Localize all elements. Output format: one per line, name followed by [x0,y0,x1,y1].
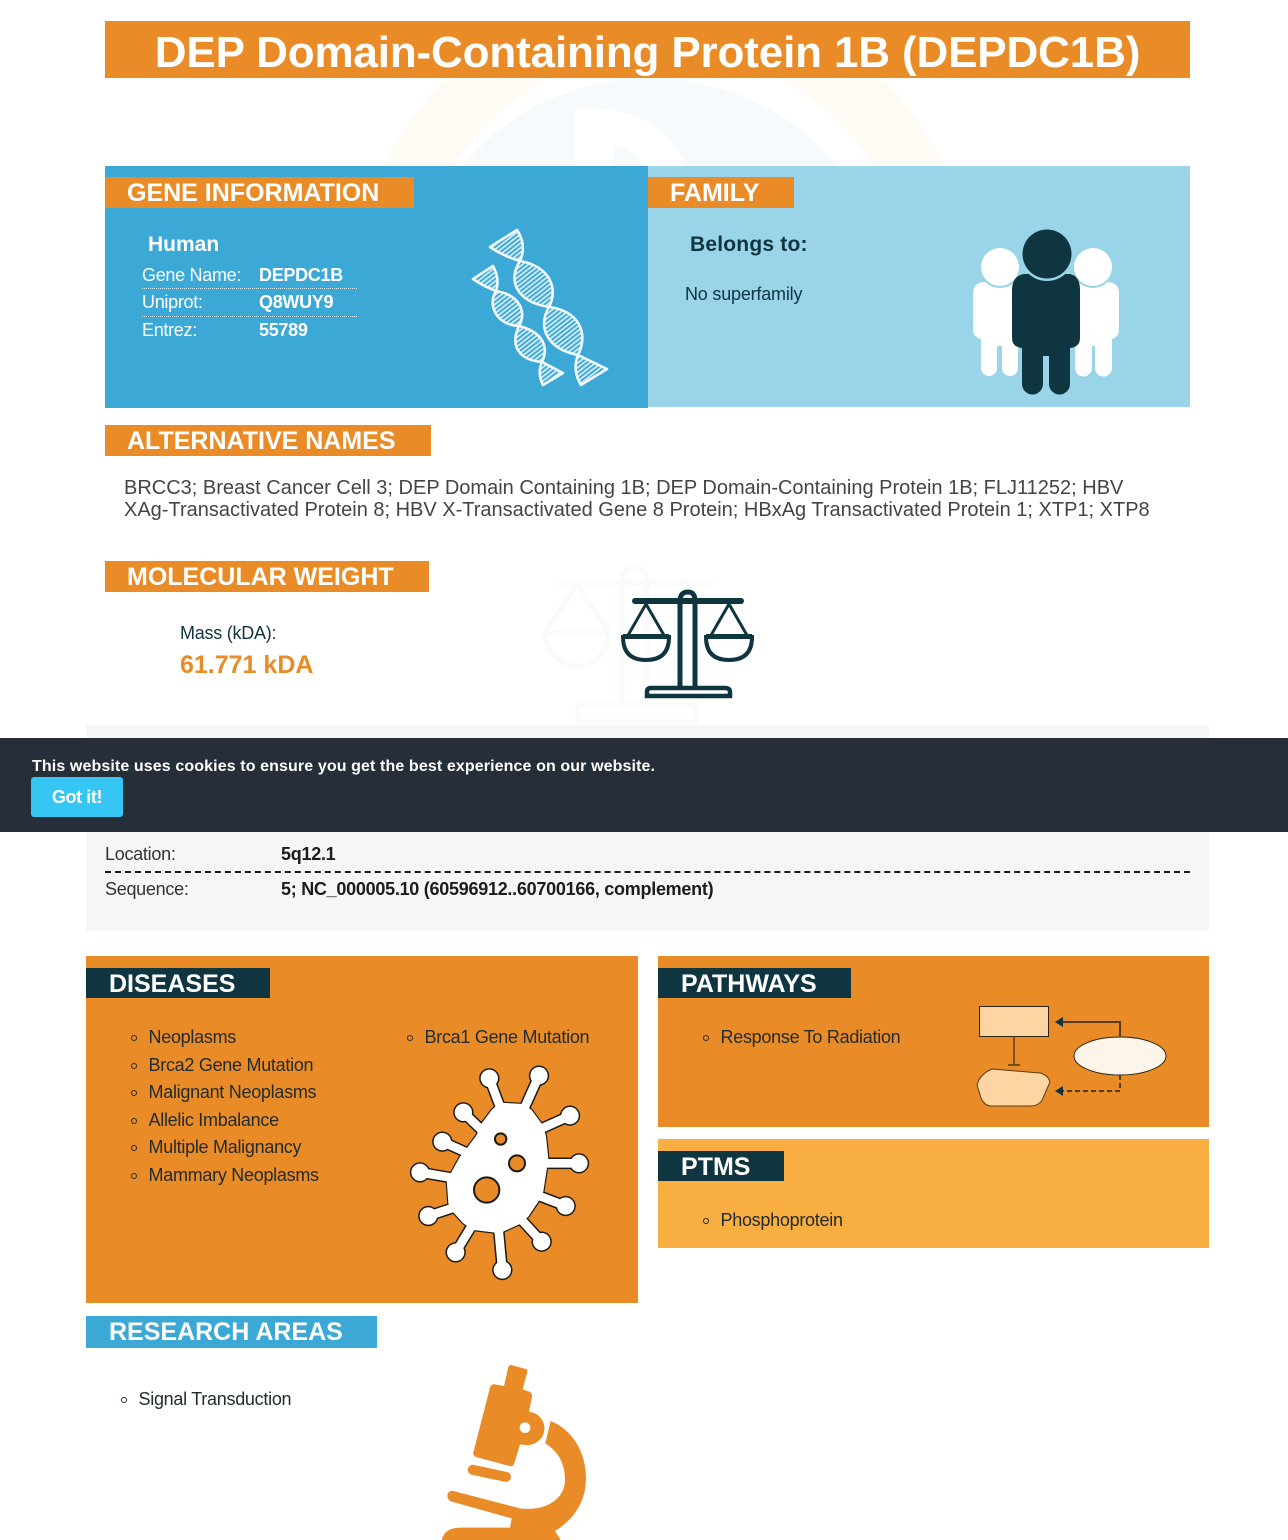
heading: research areas: RESEARCH AREAS [109,1318,343,1346]
disease list: Brca2 Gene Mutation [148,1055,313,1075]
icon: pathway diagram [976,1006,1166,1106]
gene name row: Gene Name: [142,265,241,285]
panel: genomic location: 5; NC_000005.10 (60596912..60700166, complement) [281,879,713,899]
superfamily text: No superfamily [685,284,802,304]
gene name row [142,264,357,289]
cookie message: This website uses cookies to ensure you get the best experience on our website. [32,758,655,774]
entrez row [142,320,308,340]
sequence row [105,879,713,899]
icon: balance scale [621,590,754,698]
uniprot row: Uniprot: [142,292,203,312]
icon: DNA helices [472,228,608,386]
icon: people [973,230,1119,394]
uniprot row [142,291,357,317]
heading: gene information: GENE INFORMATION [127,179,379,207]
location row [105,843,1190,873]
disease list: Neoplasms [148,1027,236,1047]
heading: ptms [658,1151,784,1181]
heading: pathways: PATHWAYS [681,970,817,998]
heading: diseases [86,968,270,998]
background watermark [384,78,944,166]
icon: virus [410,1065,590,1280]
mass value: 61.771 kDA [180,651,313,679]
heading: family: FAMILY [670,179,759,207]
icon: microscope [442,1365,586,1540]
cookie banner [0,738,1288,832]
uniprot row: Q8WUY9 [259,292,333,312]
heading: alternative names: ALTERNATIVE NAMES [127,427,396,455]
panel: diseases [86,956,638,1303]
alternative names text: BRCC3; Breast Cancer Cell 3; DEP Domain Containing 1B; DEP Domain-Containing Protein 1B; FLJ11252; HBV [124,477,1123,499]
disease list: Mammary Neoplasms [148,1165,319,1185]
mass label: Mass (kDA): [180,623,276,643]
heading: family [648,177,794,208]
title: DEP Domain-Containing Protein 1B (DEPDC1B) [155,28,1140,77]
entrez row: 55789 [259,320,308,340]
location row: Location: [105,844,176,864]
ptm list: Phosphoprotein [720,1210,843,1230]
disease list [131,1027,319,1185]
button: got it [31,777,123,817]
heading: molecular weight: MOLECULAR WEIGHT [127,563,394,591]
species label: Human [148,233,219,256]
heading: ptms: PTMS [681,1153,750,1181]
research areas list: Signal Transduction [138,1389,291,1409]
pathway list: Response To Radiation [720,1027,900,1047]
button: got it: Got it! [52,787,102,807]
disease list second column: Brca1 Gene Mutation [424,1027,589,1047]
alternative names text [124,477,1150,521]
disease list: Multiple Malignancy [148,1137,301,1157]
belongs to label: Belongs to: [690,233,808,256]
disease list: Malignant Neoplasms [148,1082,316,1102]
disease list: Allelic Imbalance [148,1110,279,1130]
panel: gene information [105,166,648,408]
heading: diseases: DISEASES [109,970,235,998]
sequence row: Sequence: [105,879,189,899]
panel: pathways [658,956,1209,1127]
entrez row: Entrez: [142,320,197,340]
panel: ptms [658,1139,1209,1248]
watermark: scale [535,562,725,727]
heading: pathways [658,968,851,998]
location row: 5q12.1 [281,844,335,864]
panel: genomic location [86,725,1209,931]
alternative names text: XAg-Transactivated Protein 8; HBV X-Transactivated Gene 8 Protein; HBxAg Transactivated Protein 1; XTP1; XTP8 [124,499,1150,521]
panel: family [648,166,1190,407]
gene name row: DEPDC1B [259,265,343,285]
